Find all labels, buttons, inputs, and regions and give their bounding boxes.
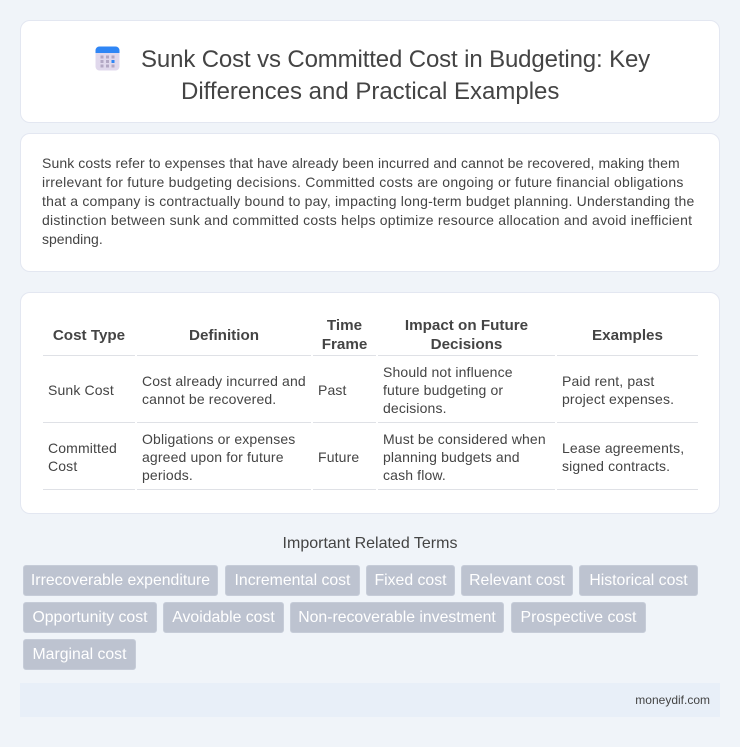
icon: calendar: [96, 46, 120, 70]
tag: [511, 602, 646, 633]
text block: description: irrelevant for future budgeting decisions. Committed costs are ongoing or future financial obligations: [42, 174, 684, 190]
tag: Incremental cost: [235, 572, 350, 589]
table header row: [53, 317, 663, 353]
table row: sunk cost: Cost already incurred and: [142, 373, 306, 389]
tag: [225, 565, 360, 596]
tag: [290, 602, 504, 633]
table row: committed cost: Cost: [48, 458, 77, 474]
table row: sunk cost: [48, 364, 674, 416]
tag: [163, 602, 284, 633]
table row: sunk cost: Should not influence: [383, 364, 513, 380]
panel: header: [20, 20, 720, 123]
table row: sunk cost: Paid rent, past: [562, 373, 654, 389]
tag: Historical cost: [589, 572, 688, 589]
footer bar: [20, 683, 720, 717]
panel: description: [20, 133, 720, 272]
text block: description: Sunk costs refer to expenses that have already been incurred and cannot be recovered, making them: [42, 155, 680, 171]
title: Sunk Cost vs Committed Cost in Budgeting: Key: [141, 46, 650, 73]
table header row: Decisions: [431, 336, 502, 353]
table row: committed cost: planning budgets and: [383, 449, 520, 465]
table header row: Frame: [322, 336, 367, 353]
table row: committed cost: Committed: [48, 440, 117, 456]
table row: committed cost: Obligations or expenses: [142, 431, 295, 447]
tag: [366, 565, 455, 596]
table row: sunk cost: decisions.: [383, 400, 447, 416]
tag: Irrecoverable expenditure: [31, 572, 210, 589]
table header row: Impact on Future: [405, 317, 528, 334]
tag: [23, 602, 157, 633]
table row: committed cost: Must be considered when: [383, 431, 546, 447]
table row: committed cost: cash flow.: [383, 467, 446, 483]
panel: comparison table: [20, 292, 720, 514]
table row: sunk cost: Past: [318, 382, 347, 398]
tag: [579, 565, 698, 596]
tag: Relevant cost: [469, 572, 565, 589]
tag: [23, 639, 136, 670]
table header row: Examples: [592, 327, 663, 344]
table row: sunk cost: cannot be recovered.: [142, 391, 276, 407]
text block: description: distinction between sunk and committed costs helps optimize resource allocation and avoid inefficient: [42, 212, 692, 228]
title: Differences and Practical Examples: [181, 78, 559, 105]
table row: committed cost: periods.: [142, 467, 193, 483]
tag: Avoidable cost: [172, 609, 275, 626]
tag: Marginal cost: [33, 646, 126, 663]
related terms tags: [23, 565, 698, 670]
table row: sunk cost: Sunk Cost: [48, 382, 114, 398]
table header row: Time: [327, 317, 362, 334]
tag: Non-recoverable investment: [298, 609, 496, 626]
table row: sunk cost: project expenses.: [562, 391, 674, 407]
footer source text: moneydif.com: [635, 693, 710, 707]
heading: related terms: Important Related Terms: [283, 535, 457, 552]
text block: description: [42, 155, 694, 247]
table row: committed cost: Future: [318, 449, 359, 465]
tag: Prospective cost: [521, 609, 636, 626]
tag: Fixed cost: [374, 572, 446, 589]
table header row: Cost Type: [53, 327, 125, 344]
table row: committed cost: Lease agreements,: [562, 440, 684, 456]
table header row: Definition: [189, 327, 259, 344]
table row: committed cost: agreed upon for future: [142, 449, 284, 465]
text block: description: spending.: [42, 231, 103, 247]
table row: sunk cost: future budgeting or: [383, 382, 503, 398]
title: [141, 46, 650, 105]
tag: [461, 565, 573, 596]
tag: [23, 565, 218, 596]
text block: description: that a company is contractually bound to pay, impacting long-term budget planning. Understanding the: [42, 193, 694, 209]
table row: committed cost: [48, 431, 684, 483]
table row: committed cost: signed contracts.: [562, 458, 670, 474]
tag: Opportunity cost: [32, 609, 148, 626]
